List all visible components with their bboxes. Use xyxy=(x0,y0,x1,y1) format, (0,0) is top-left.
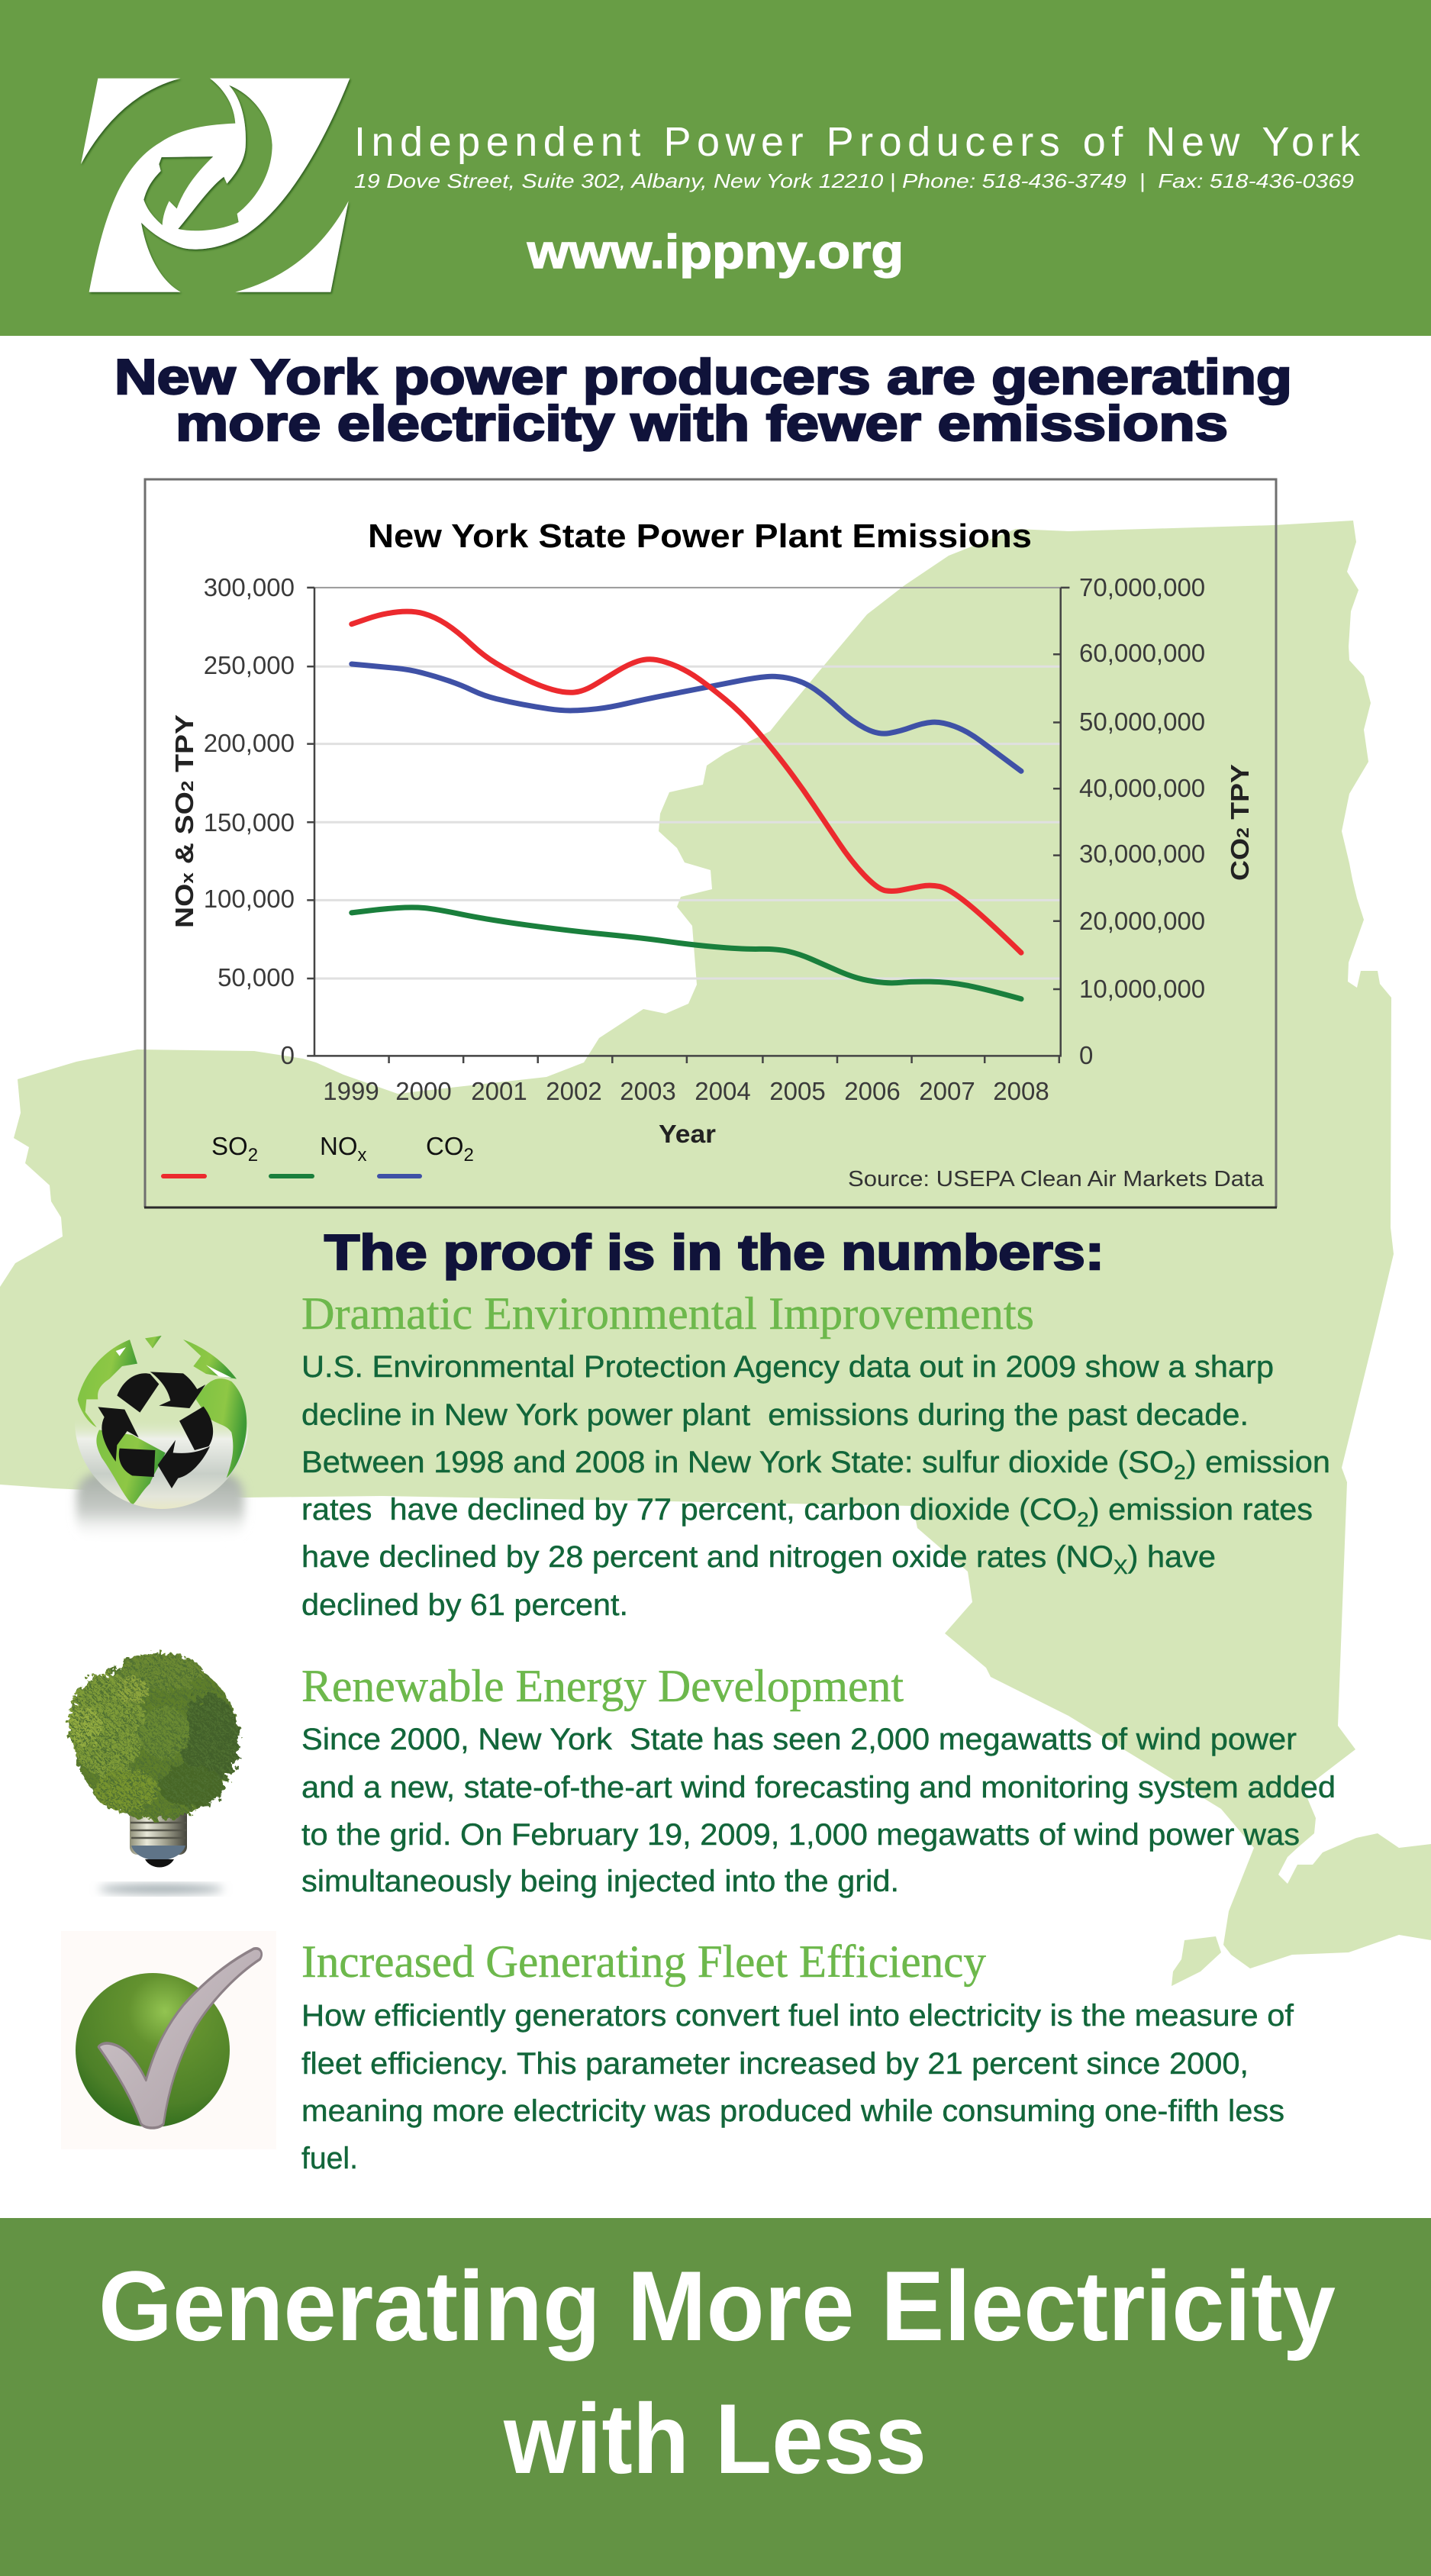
section text: Between 1998 and 2008 in New York State: sulfur dioxide (SO xyxy=(301,1446,1142,1479)
main title: more electricity with fewer emissions xyxy=(176,395,1228,451)
right axis tick labels: 60,000,000 xyxy=(1079,639,1205,667)
SO2 line xyxy=(352,611,1021,953)
address line: 19 Dove Street, Suite 302, Albany, New York 12210 | Phone: 518-436-3749 | Fax: 518-436-0369 xyxy=(354,169,1354,192)
section text: 2 xyxy=(1174,1461,1186,1484)
website: www.ippny.org xyxy=(527,226,904,279)
globe reflection xyxy=(76,1473,244,1542)
section text: declined by 61 percent. xyxy=(301,1588,628,1622)
main title xyxy=(114,349,1292,451)
left axis tick labels xyxy=(204,573,295,1069)
year labels: 1999 xyxy=(323,1077,379,1105)
chart frame xyxy=(144,479,1277,1207)
year labels: 2005 xyxy=(769,1077,826,1105)
year labels: 2002 xyxy=(546,1077,602,1105)
right axis tick labels: 70,000,000 xyxy=(1079,573,1205,601)
section: environmental improvements xyxy=(301,1288,1330,1622)
footer band xyxy=(0,2218,1431,2576)
legend: SO xyxy=(211,1132,248,1160)
left axis title: NOx & SO2 TPY xyxy=(170,714,198,928)
right axis tick labels: 0 xyxy=(1079,1041,1093,1069)
footer slogan: Generating More Electricity xyxy=(98,2250,1336,2362)
legend: CO xyxy=(426,1132,464,1160)
header band xyxy=(0,0,1431,336)
source note: Source: USEPA Clean Air Markets Data xyxy=(848,1167,1265,1191)
right axis tick labels xyxy=(1079,573,1205,1069)
section text: rates have declined by 77 percent, carbon dioxide (CO xyxy=(301,1493,1048,1527)
section text xyxy=(301,1999,1294,2175)
year labels: 2004 xyxy=(695,1077,751,1105)
legend: NO xyxy=(320,1132,357,1160)
icon: check mark xyxy=(61,1931,276,2149)
section text: fuel. xyxy=(301,2142,358,2175)
section text: ) emission rates xyxy=(1089,1493,1313,1527)
section text xyxy=(301,1723,1336,1898)
x axis title: Year xyxy=(659,1120,716,1148)
year labels: 2000 xyxy=(395,1077,452,1105)
panel: emissions line chart xyxy=(144,479,1277,1207)
left axis tick labels: 100,000 xyxy=(204,885,295,913)
year labels: 2008 xyxy=(993,1077,1049,1105)
background map of New York State xyxy=(0,521,1431,1986)
section heading: Increased Generating Fleet Efficiency xyxy=(301,1936,986,1987)
bulb shadow xyxy=(98,1884,224,1894)
CO2 line xyxy=(352,664,1021,771)
main title: New York power producers are generating xyxy=(114,349,1292,405)
left axis tick labels: 150,000 xyxy=(204,808,295,837)
icon: tree light bulb xyxy=(69,1653,239,1894)
bulb base xyxy=(130,1803,187,1867)
legend xyxy=(163,1132,474,1176)
right axis tick labels: 50,000,000 xyxy=(1079,708,1205,736)
right axis tick labels: 20,000,000 xyxy=(1079,907,1205,935)
section text: 2 xyxy=(1077,1508,1089,1531)
section text: simultaneously being injected into the grid. xyxy=(301,1865,899,1898)
chart title: New York State Power Plant Emissions xyxy=(368,517,1032,555)
right axis tick labels: 40,000,000 xyxy=(1079,774,1205,802)
organization name: Independent Power Producers of New York xyxy=(354,119,1361,165)
section text: How efficiently generators convert fuel into electricity is the measure of xyxy=(301,1999,1294,2033)
year labels: 2003 xyxy=(620,1077,676,1105)
left axis tick labels: 300,000 xyxy=(204,573,295,601)
section text xyxy=(301,1350,1330,1622)
icon: IPPNY logo xyxy=(81,79,350,292)
left axis tick labels: 0 xyxy=(281,1041,295,1069)
year labels: 2006 xyxy=(844,1077,901,1105)
section text: decline in New York power plant emissions during the past decade. xyxy=(301,1398,1249,1432)
right axis title: CO2 TPY xyxy=(1226,764,1254,881)
section text: U.S. Environmental Protection Agency data out in 2009 show a sharp xyxy=(301,1350,1274,1384)
section text: fleet efficiency. This parameter increased by 21 percent since 2000, xyxy=(301,2047,1249,2081)
section text: ) emission xyxy=(1186,1446,1330,1479)
section text: X xyxy=(1114,1556,1128,1578)
left axis tick labels: 50,000 xyxy=(218,963,295,991)
section heading: Renewable Energy Development xyxy=(301,1661,904,1711)
section: renewable energy xyxy=(301,1661,1336,1898)
year labels: 2007 xyxy=(919,1077,975,1105)
year labels xyxy=(323,1077,1049,1105)
section text: ) have xyxy=(1128,1540,1216,1574)
section text: to the grid. On February 19, 2009, 1,000 megawatts of wind power was xyxy=(301,1818,1300,1852)
year labels: 2001 xyxy=(471,1077,527,1105)
right axis tick labels: 30,000,000 xyxy=(1079,840,1205,868)
left axis tick labels: 200,000 xyxy=(204,729,295,757)
NOx line xyxy=(352,908,1021,999)
section text: have declined by 28 percent and nitrogen oxide rates (NO xyxy=(301,1540,1084,1574)
heading: proof in numbers: The proof is in the numbers: xyxy=(324,1224,1104,1280)
icon: recycling globe xyxy=(75,1333,249,1542)
section text: and a new, state-of-the-art wind forecasting and monitoring system added xyxy=(301,1771,1336,1804)
section text: Since 2000, New York State has seen 2,000 megawatts of wind power xyxy=(301,1723,1297,1756)
legend: 2 xyxy=(464,1145,474,1165)
right axis tick labels: 10,000,000 xyxy=(1079,975,1205,1003)
left axis tick labels: 250,000 xyxy=(204,651,295,679)
legend: 2 xyxy=(248,1145,258,1165)
section text: meaning more electricity was produced while consuming one-fifth less xyxy=(301,2094,1284,2128)
axes and tick marks xyxy=(307,588,1069,1063)
section heading: Dramatic Environmental Improvements xyxy=(301,1288,1034,1339)
footer band: with Less xyxy=(503,2383,927,2494)
legend: x xyxy=(357,1145,366,1165)
section: fleet efficiency xyxy=(301,1936,1294,2175)
tree foliage xyxy=(69,1653,239,1820)
